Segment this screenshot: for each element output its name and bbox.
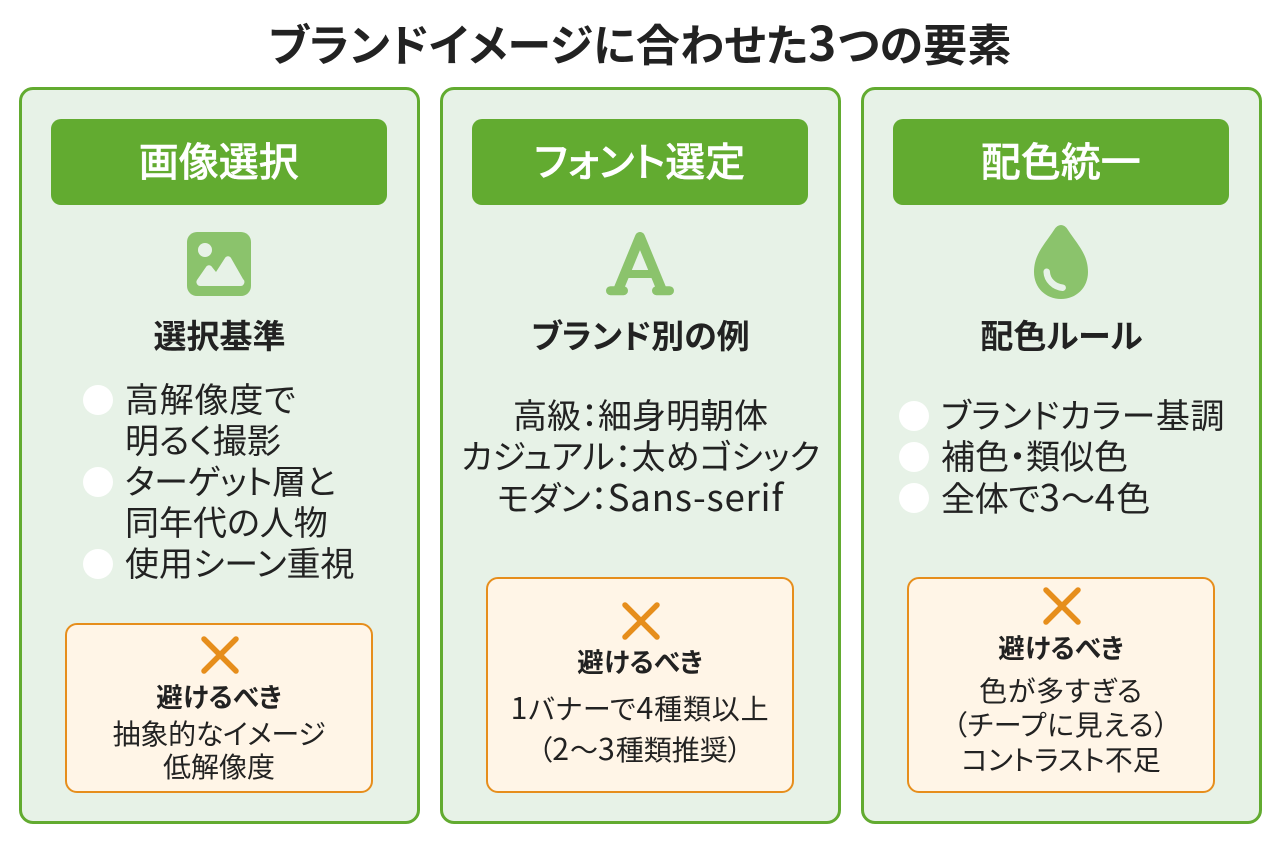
bullet text 1: 高解像度で [125,373,296,422]
subheading: 選択基準 [154,310,286,358]
bullet 3 [83,549,113,579]
warning label: 避けるべき [156,676,282,715]
icon: image [187,232,251,296]
warning text continued: （チープに見える） [953,704,1169,744]
bullet text 1 continued: 明るく撮影 [125,414,281,463]
bullet 1 [83,385,113,415]
warning box [907,577,1215,793]
bullet text 3: 使用シーン重視 [125,537,354,586]
warning text: 抽象的なイメージ [113,713,325,753]
subheading: 配色ルール [980,310,1143,358]
header: colour unification: 配色統一 [981,130,1141,188]
bullet 3 [899,483,929,513]
font example 2: カジュアル：太めゴシック [461,430,820,479]
warning label: 避けるべき [577,641,703,680]
bullet text 2 continued: 同年代の人物 [125,496,328,545]
rules list [899,389,1225,522]
header: font selection [472,119,808,205]
warning box [486,577,794,793]
bullet text 2: ターゲット層と [125,455,335,504]
criteria list [83,373,354,586]
panel: colour unification [861,87,1262,824]
panel background [861,87,1262,824]
icon: cross [201,636,239,674]
warning box [65,623,373,793]
header: colour unification [892,119,1229,205]
warning text continued: コントラスト不足 [961,739,1161,779]
bullet text 3: 全体で3～4色 [941,468,1150,522]
font example 1: 高級：細身明朝体 [513,389,768,438]
header: image selection: 画像選択 [139,130,299,188]
icon: cross [622,602,660,640]
panel background [19,87,420,824]
bullet 2 [83,467,113,497]
warning text: 色が多すぎる [979,670,1143,710]
font example 3: モダン：Sans-serif [497,468,784,522]
title: ブランドイメージに合わせた3つの要素 [268,6,1012,75]
icon: cross [1043,587,1081,625]
warning text continued: 低解像度 [163,746,275,786]
bullet text 2: 補色・類似色 [941,430,1128,479]
warning label: 避けるべき [998,627,1124,666]
header: font selection: フォント選定 [534,130,745,188]
bullet 1 [899,401,929,431]
icon: water drop [1034,225,1088,299]
warning text continued: （2～3種類推奨） [538,725,742,769]
subheading: ブランド別の例 [531,310,750,358]
bullet 2 [899,442,929,472]
header: image selection [50,119,387,205]
panel: image selection [19,87,420,824]
warning text: 1バナーで4種類以上 [511,684,769,728]
panel: font selection [440,87,841,824]
panel background [440,87,841,824]
bullet text 1: ブランドカラー基調 [941,389,1225,438]
icon: letter A [606,232,674,296]
